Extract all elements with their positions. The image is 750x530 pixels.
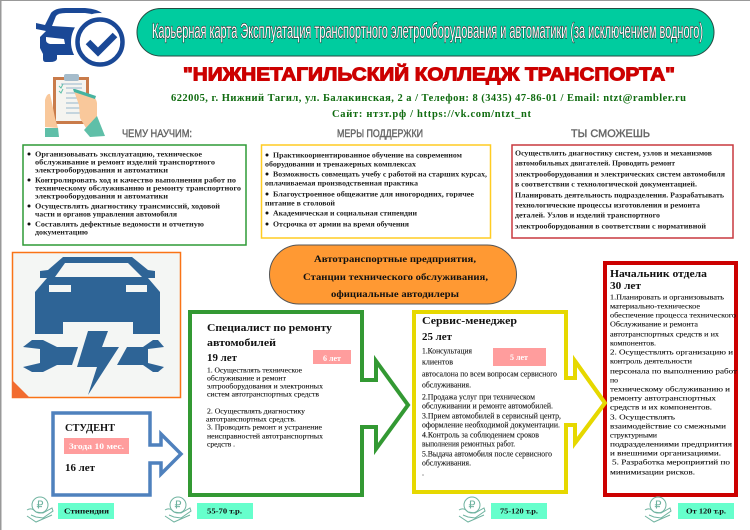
college name heading: "НИЖНЕТАГИЛЬСКИЙ КОЛЛЕДЖ ТРАНСПОРТА": [183, 64, 675, 84]
panel: what we teach: обслуживание и ремонт изделий транспортного: [35, 158, 215, 166]
arrow card: service manager: выполнения ремонтных работ.: [422, 440, 515, 448]
arrow card: repair specialist: 2. Осуществлять диагностику: [207, 406, 305, 416]
address line: 622005, г. Нижний Тагил, ул. Балакинская, 2 а / Телефон: 8 (3435) 47-86-01 / Email: ntzt@rambler.ru: [171, 93, 686, 104]
panel: department head: 3. Осуществлять: [610, 412, 676, 422]
panel: you will be able to: технологические процессы изготовления и ремонта: [515, 200, 700, 210]
arrow card: service manager: 25 лет: [422, 332, 453, 343]
salary tag: stipend: Стипендия: [64, 506, 109, 516]
panel: department head: Начальник отдела: [610, 269, 708, 280]
arrow card: repair specialist: неисправностей автотранспортных: [207, 432, 323, 440]
heading: what we teach: ЧЕМУ НАУЧИМ:: [122, 128, 192, 140]
panel: employers pill: [270, 245, 516, 304]
arrow card: repair specialist: 6 лет: [323, 354, 341, 363]
panel: you will be able to: Планировать деятельность подразделения. Разрабатывать: [515, 190, 724, 200]
panel: department head: 1.Планировать и организовывать: [610, 292, 725, 302]
arrow card: repair specialist: автотранспортных средств.: [206, 414, 296, 424]
arrow card: student: СТУДЕНТ: [65, 423, 115, 434]
arrow card: service manager: 4.Контроль за соблюдением сроков: [422, 430, 539, 440]
panel: department head: Обслуживание и ремонта: [610, 320, 699, 328]
icon: clipboard and hands: [45, 74, 105, 137]
panel: department head: контроль деятельности: [610, 356, 692, 366]
panel: employers pill: Автотранспортные предприятия,: [314, 255, 477, 265]
website line: Сайт: нтзт.рф / https://vk.com/ntzt_nt: [332, 109, 532, 120]
panel: you will be able to: Осуществлять диагностику систем, узлов и механизмов: [515, 148, 712, 158]
salary tag: stipend: [58, 503, 114, 519]
arrow card: service manager: [414, 312, 605, 492]
arrow card: repair specialist: обслуживание и ремонт: [207, 374, 287, 382]
panel: what we teach: электрооборудования и автоматики: [35, 192, 169, 200]
icon: ruble hand 2: [165, 497, 191, 522]
arrow card: service manager: .: [422, 468, 424, 478]
panel: you will be able to: деталей. Узлов и изделий транспортного: [515, 210, 660, 220]
icon: ruble hand 3: [459, 497, 485, 522]
salary tag: 75-120: [491, 503, 547, 519]
panel: employers pill: официальные автодилеры: [331, 289, 460, 300]
arrow card: student: 3года 10 мес.: [69, 442, 124, 451]
panel: department head: взаимодействие со смежными: [610, 422, 726, 430]
panel: support measures: оборудовании и тренажерных комплексах: [265, 160, 416, 168]
arrow card: service manager: обслуживания.: [422, 458, 471, 468]
panel: support measures: Практикоориентированное обучение на современном: [273, 150, 462, 160]
panel: department head: минимизации рисков.: [610, 468, 695, 476]
arrow card: repair specialist: [190, 312, 408, 495]
arrow card: service manager: обслуживании и ремонте автомобилей.: [422, 402, 553, 410]
icon: ruble hand 3: ₽: [468, 500, 476, 512]
icon: ruble hand 1: ₽: [36, 500, 44, 512]
heading: support measures: МЕРЫ ПОДДЕРЖКИ: [337, 128, 423, 140]
arrow card: service manager: оформление необходимой документации.: [422, 420, 560, 430]
panel: department head: материально-техническое: [610, 302, 701, 310]
arrow card: student: 16 лет: [65, 463, 95, 474]
icon: ruble hand 2: ₽: [174, 500, 182, 512]
arrow card: repair specialist: 19 лет: [207, 353, 238, 364]
panel: department head: 5. Разработка мероприятий по: [612, 458, 730, 466]
panel: support measures: оплачиваемая производственная практика: [265, 178, 418, 188]
arrow card: service manager: 3.Прием автомобилей в сервисный центр,: [422, 412, 561, 420]
arrow card: service manager: 5.Выдача автомобиля после сервисного: [422, 450, 552, 458]
panel: you will be able to: в соответствии с технологической документацией.: [515, 180, 697, 188]
panel: what we teach: Организовывать эксплуатацию, техническое: [35, 150, 203, 158]
panel: you will be able to: автомобильных двигателей. Проводить ремонт: [515, 158, 675, 168]
arrow card: repair specialist: 1. Осуществлять техническое: [207, 366, 303, 374]
panel: department head: подразделениями предприятия: [610, 440, 733, 448]
panel: what we teach: техническому обслуживанию и ремонту транспортного: [35, 184, 241, 192]
arrow card: service manager: 2.Продажа услуг при техническом: [422, 392, 535, 402]
panel: department head: ремонту автотранспортных: [610, 394, 716, 402]
panel: employers pill: Станции технического обслуживания,: [303, 272, 489, 283]
panel: department head: и внешними организациями.: [610, 448, 721, 458]
arrow card: repair specialist: Специалист по ремонту: [207, 323, 333, 334]
heading: you will be able to: ТЫ СМОЖЕШЬ: [571, 128, 650, 140]
icon: car repair with wrenches and lightning: [12, 252, 180, 398]
panel: support measures: Академическая и социальная стипендии: [273, 208, 418, 218]
icon: ruble hand 4: ₽: [654, 500, 662, 512]
panel: department head: автотранспортных средств и их: [610, 330, 719, 338]
panel: what we teach: Контролировать ход и качество выполнения работ по: [35, 176, 236, 184]
arrow card: service manager: клиентов: [422, 358, 453, 366]
panel: what we teach: электрооборудования и автоматики: [35, 166, 169, 174]
arrow card: service manager: Сервис-менеджер: [422, 316, 517, 327]
arrow card: repair specialist: элтрооборудования и электронных: [207, 382, 323, 390]
arrow card: repair specialist: 3. Проводить ремонт и устранение: [207, 422, 323, 432]
panel: department head: средств и их компонентов.: [610, 402, 712, 412]
icon: car with check mark: [36, 8, 129, 71]
panel: support measures: Отсрочка от армии на время обучения: [273, 220, 409, 228]
panel: department head: структурными: [610, 430, 657, 440]
panel: what we teach: Осуществлять диагностику трансмиссий, ходовой: [35, 202, 221, 210]
panel: department head: техническому обслуживанию и: [610, 384, 730, 394]
salary tag: 55-70: 55-70 т.р.: [207, 506, 242, 516]
arrow card: repair specialist: систем автотранспортных средств: [207, 390, 319, 398]
title banner: [137, 8, 714, 56]
panel: what we teach: Составлять дефектные ведомости и отчетную: [35, 220, 204, 228]
arrow card: student: [53, 413, 181, 495]
arrow card: service manager: 1.Консультация: [422, 346, 472, 356]
panel: department head: [575, 263, 738, 495]
panel: support measures: Возможность совмещать учебу с работой на старших курсах,: [273, 170, 487, 178]
panel: department head: персонала по выполнению работ: [610, 366, 738, 376]
arrow card: service manager: автосалона по всем вопросам сервисного: [422, 370, 557, 378]
panel: what we teach: части и органов управления автомобиля: [35, 210, 177, 218]
panel: support measures: [262, 145, 490, 238]
panel: what we teach: документацию: [35, 228, 88, 236]
panel: department head: по: [610, 376, 618, 384]
panel: department head: 30 лет: [610, 281, 642, 292]
panel: support measures: Благоустроенное общежитие для иногородних, горячее: [273, 190, 475, 198]
arrow card: repair specialist: автомобилей: [207, 338, 276, 349]
salary tag: from 120: [678, 503, 734, 519]
panel: you will be able to: [512, 145, 733, 238]
salary tag: from 120: От 120 т.р.: [686, 506, 726, 516]
panel: support measures: питание в столовой: [265, 198, 336, 208]
salary tag: 55-70: [197, 503, 253, 519]
panel: department head: 2. Осуществлять организацию и: [610, 348, 733, 356]
arrow card: repair specialist: средств .: [207, 440, 235, 448]
salary tag: 75-120: 75-120 т.р.: [500, 506, 538, 516]
panel: you will be able to: электрооборудования в соответствии с нормативной: [515, 222, 707, 230]
panel: department head: компонентов.: [610, 338, 656, 348]
panel: what we teach: [23, 145, 246, 245]
icon: ruble hand 1: [27, 497, 53, 522]
arrow card: service manager: обслуживания.: [422, 380, 471, 390]
panel: you will be able to: электрооборудования и электрических систем автомобиля: [515, 170, 725, 178]
icon: ruble hand 4: [645, 497, 671, 522]
arrow card: service manager: 5 лет: [510, 353, 528, 362]
panel: department head: обеспечение процесса технического: [610, 310, 736, 320]
